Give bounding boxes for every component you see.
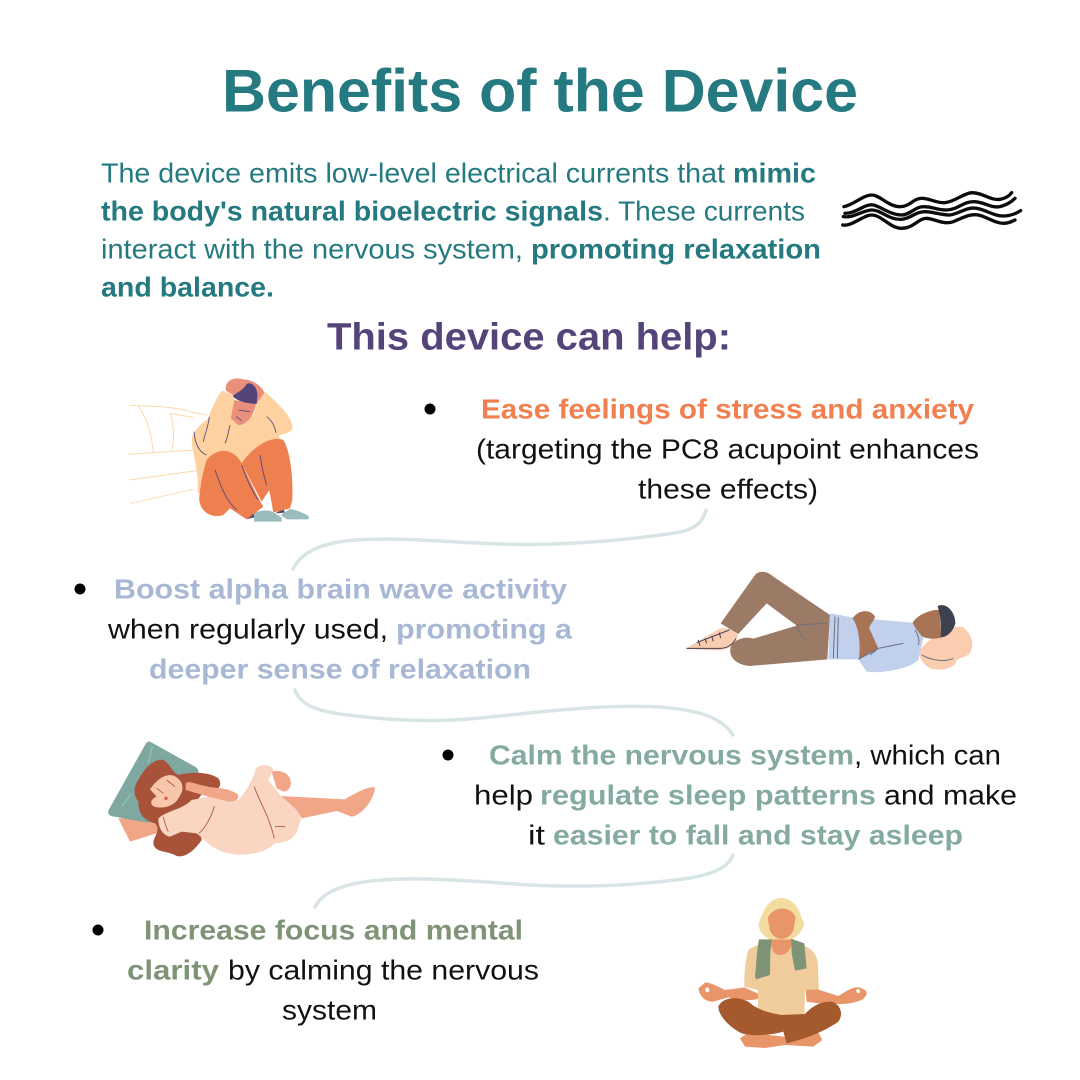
intro text block: The device emits low-level electrical currents that	[101, 158, 725, 189]
benefit: focus and mental clarity: clarity	[127, 955, 219, 986]
benefit: calm nervous system: Calm the nervous system	[489, 740, 854, 771]
connector: stress to alpha waves	[293, 510, 706, 569]
intro text block: the body's natural bioelectric signals	[101, 196, 603, 227]
benefit: stress and anxiety: these effects)	[638, 474, 818, 505]
benefit: calm nervous system: regulate sleep patterns	[540, 780, 876, 811]
benefit: alpha brain waves: deeper sense of relaxation	[149, 654, 531, 685]
benefit: stress and anxiety: (targeting the PC8 acupoint enhances	[476, 434, 979, 465]
benefit: calm nervous system: , which can	[854, 740, 1001, 771]
benefit: calm nervous system	[442, 740, 1017, 851]
benefit: focus and mental clarity: system	[282, 995, 377, 1026]
benefit: alpha brain waves: when regularly used,	[107, 614, 388, 645]
intro text block: and balance.	[101, 272, 274, 303]
intro text block: mimic	[733, 158, 816, 189]
intro text block: interact with the nervous system,	[101, 234, 523, 265]
benefit: calm nervous system: easier to fall and stay asleep	[553, 820, 963, 851]
subheading: This device can help:	[327, 317, 731, 359]
title: Benefits of the Device	[222, 58, 858, 125]
benefit: calm nervous system: it	[528, 820, 545, 851]
benefit: focus and mental clarity	[92, 915, 539, 1026]
illustration: man lying on pillow	[685, 572, 972, 672]
benefit: stress and anxiety: Ease feelings of stress and anxiety	[481, 394, 974, 425]
benefit: alpha brain waves	[74, 574, 572, 685]
icon: electrical waves	[843, 193, 1021, 228]
benefit: calm nervous system: and make	[884, 780, 1017, 811]
benefit: stress and anxiety	[424, 394, 979, 505]
benefit: calm nervous system: help	[474, 780, 533, 811]
connector: alpha waves to nervous system	[295, 690, 733, 735]
illustration: woman sleeping	[108, 741, 375, 856]
benefit: alpha brain waves: promoting a	[396, 614, 572, 645]
illustration: stressed person holding head	[128, 379, 309, 522]
benefit: focus and mental clarity: by calming the nervous	[228, 955, 539, 986]
connector: nervous system to focus	[315, 855, 733, 907]
intro text block: . These currents	[603, 196, 805, 227]
benefit: focus and mental clarity: Increase focus and mental	[144, 915, 523, 946]
intro text block: promoting relaxation	[531, 234, 821, 265]
benefit: alpha brain waves: Boost alpha brain wave activity	[114, 574, 567, 605]
illustration: person meditating	[698, 898, 867, 1048]
intro text block	[101, 158, 821, 303]
